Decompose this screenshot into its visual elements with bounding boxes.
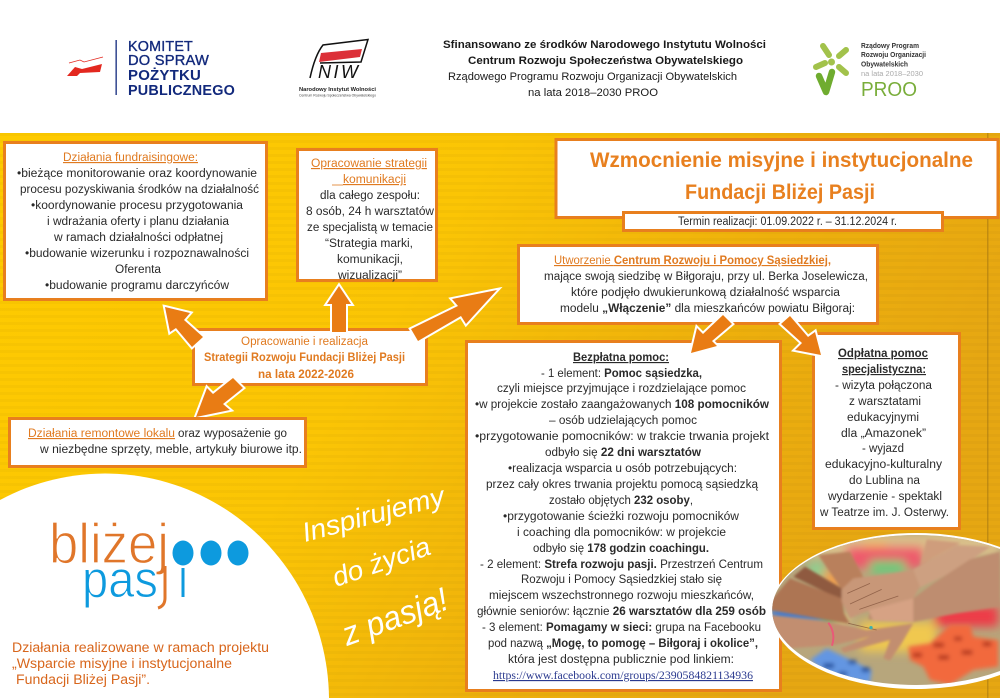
- text: free help details: •przygotowanie ścieżki rozwoju pomocników: [503, 511, 740, 523]
- text: free help details: zostało objętych 232 osoby,: [549, 495, 693, 507]
- text: paid help details: do Lublina na: [849, 475, 921, 487]
- text: paid help details: wydarzenie - spektakl: [827, 491, 942, 503]
- text: paid help details: w Teatrze im. J. Osterwy.: [819, 507, 949, 519]
- logo: PROO: na lata 2018–2030: [861, 71, 923, 78]
- funding statement: Rządowego Programu Rozwoju Organizacji Obywatelskich: [448, 71, 737, 83]
- panel: free help: [466, 342, 780, 690]
- panel: strategy 2022-2026: [194, 330, 426, 384]
- arrow: to renovation: [196, 378, 243, 417]
- logo: NIW: NIW: [318, 62, 360, 82]
- text: free help details: [475, 368, 770, 666]
- logo: PROO: PROO: [861, 79, 917, 101]
- text: free help details: •realizacja wsparcia u osób potrzebujących:: [508, 463, 737, 475]
- logo: Bliżej Pasji: pas: [82, 551, 158, 609]
- list: fundraising items: •budowanie wizerunku i rozpoznawalności: [25, 248, 249, 260]
- text: free help details: – osób udzielających pomoc: [549, 415, 697, 427]
- funding statement: [443, 39, 766, 99]
- panel: project dates: [624, 212, 942, 230]
- text: paid help details: edukacyjnymi: [847, 412, 919, 424]
- panel: renovation: oraz wyposażenie go: [178, 428, 287, 440]
- text: paid help details: - wyjazd: [862, 443, 904, 455]
- slogan: handwritten: [299, 481, 453, 653]
- funding statement: Centrum Rozwoju Społeczeństwa Obywatelskiego: [468, 55, 743, 67]
- list: fundraising items: [17, 168, 259, 292]
- panel: Centrum Rozwoju i Pomocy Sąsiedzkiej: modelu „Włączenie” dla mieszkańców powiatu Biłgoraj:: [560, 303, 855, 315]
- text: project note: Działania realizowane w ramach projektu: [12, 640, 269, 655]
- arrow: to paid help: [781, 316, 821, 355]
- logo: PROO: [816, 43, 926, 101]
- text: free help details: i coaching dla pomocników: w projekcie: [517, 527, 726, 539]
- text: free help details: odbyło się 178 godzin coachingu.: [533, 543, 709, 555]
- panel: fundraising activities: [4, 142, 266, 300]
- funding statement: Sfinansowano ze środków Narodowego Instytutu Wolności: [443, 39, 766, 51]
- panel: communication strategy: [298, 150, 436, 282]
- text: communication strategy details: “Strategia marki,: [325, 238, 413, 250]
- heading: communication strategy: komunikacji: [343, 174, 406, 186]
- text: free help details: - 2 element: Strefa rozwoju pasji. Przestrzeń Centrum: [480, 559, 763, 571]
- panel: title: Wzmocnienie misyjne i instytucjonalne: [590, 149, 973, 172]
- funding statement: na lata 2018–2030 PROO: [528, 87, 658, 99]
- slogan: handwritten: Inspirujemy: [299, 481, 449, 548]
- heading: paid help: [838, 348, 929, 376]
- text: communication strategy details: ze specjalistą w temacie: [307, 222, 433, 234]
- arrow: to Centrum: [411, 290, 497, 341]
- logo wordmark: [128, 39, 235, 99]
- photo: joined hands: [770, 530, 1000, 695]
- text: paid help details: edukacyjno-kulturalny: [825, 459, 942, 471]
- logo: NIW: Centrum Rozwoju Społeczeństwa Obywatelskiego: [299, 94, 376, 98]
- text: paid help details: z warsztatami: [849, 396, 921, 408]
- text: project note: [12, 640, 269, 687]
- text: communication strategy details: [306, 190, 435, 282]
- panel: project dates: Termin realizacji: 01.09.2022 r. – 31.12.2024 r.: [678, 216, 897, 228]
- text: free help details: przez cały okres trwania projektu pomocą sąsiedzką: [486, 479, 759, 491]
- panel: white circle with logo: [0, 474, 329, 698]
- text: free help details: która jest dostępna publicznie pod linkiem:: [508, 654, 734, 666]
- text: paid help details: [819, 380, 949, 519]
- panel: title: Fundacji Bliżej Pasji: [685, 181, 875, 204]
- text: communication strategy details: 8 osób, 24 h warsztatów: [306, 206, 435, 218]
- panel: paid specialist help: [814, 334, 960, 528]
- text: free help details: - 3 element: Pomagamy w sieci: grupa na Facebooku: [482, 622, 761, 634]
- panel: renovation: w niezbędne sprzęty, meble, artykuły biurowe itp.: [39, 444, 302, 456]
- text: project note: Fundacji Bliżej Pasji”.: [16, 672, 150, 687]
- list: fundraising items: •budowanie programu darczyńców: [45, 280, 230, 292]
- slogan: handwritten: z pasją!: [336, 580, 453, 653]
- arrow: to communication strategy: [327, 286, 351, 332]
- text: paid help details: dla „Amazonek”: [841, 428, 926, 440]
- panel: Centrum Rozwoju i Pomocy Sąsiedzkiej: mające swoją siedzibę w Biłgoraju, przy ul. Berka Joselewicza,: [544, 271, 868, 283]
- logo: NIW: Narodowy Instytut Wolności: [299, 87, 376, 93]
- list: fundraising items: •koordynowanie procesu przygotowania: [31, 200, 244, 212]
- icon: green flower: [816, 46, 846, 92]
- slogan: handwritten: do życia: [328, 531, 434, 593]
- text: communication strategy details: dla całego zespołu:: [320, 190, 420, 202]
- arrow: to free help: [691, 315, 732, 353]
- text: free help details: •w projekcie zostało zaangażowanych 108 pomocników: [475, 399, 769, 411]
- panel: strategy 2022-2026: Opracowanie i realizacja: [241, 336, 369, 348]
- text: free help details: •przygotowanie pomocników: w trakcie trwania projekt: [475, 431, 770, 443]
- heading: paid help: specjalistyczna:: [842, 364, 926, 376]
- icon: NIW flag: [310, 40, 368, 78]
- list: fundraising items: procesu pozyskiwania środków na działalność: [20, 184, 259, 196]
- panel: renovation: Działania remontowe lokalu: [28, 428, 175, 440]
- logo: PROO: Rozwoju Organizacji: [861, 52, 926, 59]
- text: free help details: czyli miejsce przyjmujące i rozdzielające pomoc: [497, 383, 746, 395]
- panel: Centrum Rozwoju i Pomocy Sąsiedzkiej: [518, 246, 878, 324]
- heading: communication strategy: [311, 158, 427, 186]
- heading: paid help: Odpłatna pomoc: [838, 348, 929, 360]
- panel: Centrum Rozwoju i Pomocy Sąsiedzkiej: które podjęło dwukierunkową działalność wsparcia: [571, 287, 841, 299]
- arrow: to fundraising: [165, 307, 203, 347]
- logo wordmark: PUBLICZNEGO: [128, 83, 235, 99]
- icon: red flag: [67, 57, 103, 76]
- text: communication strategy details: wizualizacji”: [337, 270, 402, 282]
- list: fundraising items: Oferenta: [115, 264, 162, 276]
- heading: communication strategy: Opracowanie strategii: [311, 158, 427, 170]
- text: free help details: miejscem wszechstronnego rozwoju mieszkańców,: [489, 590, 754, 602]
- logo: PROO: Rządowy Program: [861, 43, 919, 50]
- panel: title: [556, 140, 998, 218]
- heading: free help: Bezpłatna pomoc:: [573, 352, 669, 364]
- logo: NIW: [299, 40, 376, 98]
- list: fundraising items: w ramach działalności odpłatnej: [53, 232, 223, 244]
- panel: strategy 2022-2026: Strategii Rozwoju Fundacji Bliżej Pasji: [204, 352, 405, 364]
- text: free help details: pod nazwą „Mogę, to pomogę – Biłgoraj i okolice”,: [488, 638, 758, 650]
- text: paid help details: - wizyta połączona: [835, 380, 933, 392]
- text: project note: „Wsparcie misyjne i instytucjonalne: [12, 656, 232, 671]
- logo: Bliżej Pasji: [49, 512, 248, 609]
- panel: Centrum Rozwoju i Pomocy Sąsiedzkiej: Utworzenie Centrum Rozwoju i Pomocy Sąsiedzkiej,: [554, 255, 831, 267]
- text: free help details: Rozwoju i Pomocy Sąsiedzkiej stało się: [521, 574, 722, 586]
- panel: strategy 2022-2026: na lata 2022-2026: [258, 369, 354, 381]
- logo wordmark: POŻYTKU: [128, 67, 201, 84]
- text: free help details: - 1 element: Pomoc sąsiedzka,: [541, 368, 702, 380]
- text: free help details: odbyło się 22 dni warsztatów: [545, 447, 701, 459]
- text: free help details: głównie seniorów: łącznie 26 warsztatów dla 259 osób: [477, 606, 766, 618]
- text: communication strategy details: komunikacji,: [337, 254, 403, 266]
- logo wordmark: DO SPRAW: [128, 53, 209, 69]
- heading: fundraising: Działania fundraisingowe:: [63, 152, 198, 164]
- panel: renovation: [10, 418, 306, 466]
- logo: Bliżej Pasji: bliżej: [49, 512, 169, 576]
- list: fundraising items: i wdrażania oferty i planu działania: [47, 216, 230, 228]
- logo wordmark: KOMITET: [128, 39, 193, 55]
- logo: Komitet do spraw Pożytku Publicznego: [67, 39, 235, 99]
- link: Facebook group: https://www.facebook.com/groups/2390584821134936: [493, 670, 753, 682]
- list: fundraising items: •bieżące monitorowanie oraz koordynowanie: [17, 168, 257, 180]
- logo: PROO: Obywatelskich: [861, 62, 908, 68]
